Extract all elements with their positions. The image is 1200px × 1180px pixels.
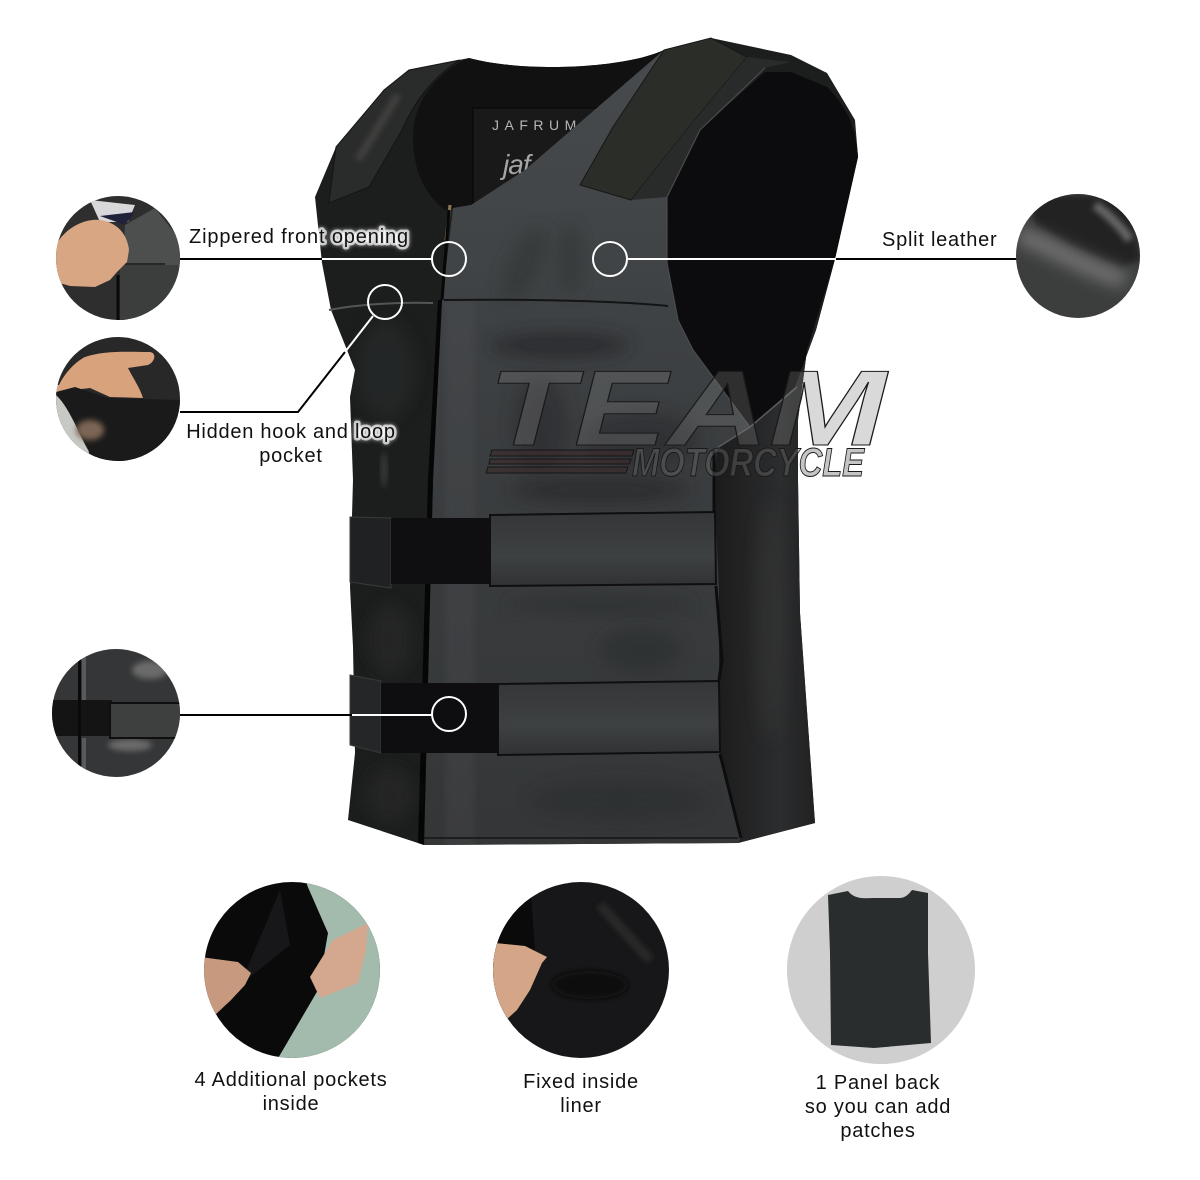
upper left tab bbox=[350, 517, 391, 588]
label: Zippered front opening bbox=[189, 226, 409, 248]
armhole piping bbox=[717, 387, 797, 448]
callout: hidden pocket: pocket bbox=[259, 445, 323, 467]
leader line bbox=[180, 352, 345, 412]
thumbnail: leather texture bbox=[1016, 194, 1140, 318]
back panel bbox=[714, 259, 835, 843]
watermark: Team Motorcycle: MOTORCYCLE bbox=[632, 441, 865, 485]
marker bbox=[593, 242, 627, 276]
lower right tab bbox=[498, 681, 720, 755]
watermark: Team Motorcycle: TEAM bbox=[488, 348, 890, 468]
callout: strap bbox=[52, 649, 466, 777]
thumbnail: pockets bbox=[200, 880, 385, 1060]
thumbnail: zipper bbox=[56, 196, 180, 320]
feature: panel back: patches bbox=[840, 1120, 916, 1142]
right shoulder strap bbox=[580, 38, 747, 200]
feature: fixed liner: liner bbox=[560, 1095, 602, 1117]
callout: zippered front opening bbox=[56, 196, 466, 320]
upper velcro band bbox=[391, 518, 491, 584]
left shoulder strap bbox=[329, 60, 460, 203]
brand text on label: JAFRUM bbox=[492, 117, 582, 133]
callout: split leather bbox=[593, 194, 1140, 318]
feature: additional pockets: inside bbox=[263, 1093, 319, 1115]
left pocket seam bbox=[329, 303, 433, 310]
thumbnail background bbox=[787, 876, 975, 1064]
leader line over vest bbox=[322, 258, 432, 260]
marker bbox=[432, 697, 466, 731]
left strap highlight bbox=[358, 95, 398, 160]
upper right tab bbox=[490, 512, 716, 586]
label: Fixed inside bbox=[523, 1071, 639, 1093]
label: 4 Additional pockets bbox=[195, 1069, 387, 1091]
thumbnail: strap bbox=[52, 649, 180, 777]
callout: hidden pocket bbox=[56, 285, 402, 467]
side seam bbox=[714, 450, 741, 838]
leader line bbox=[180, 258, 322, 260]
leather mottling bbox=[493, 236, 696, 666]
lower left tab bbox=[350, 675, 381, 753]
stitched seam bbox=[444, 300, 668, 306]
lower velcro band bbox=[381, 683, 499, 753]
neck interior bbox=[413, 50, 664, 210]
thumbnail: vest back bbox=[828, 890, 931, 1048]
thumbnail: pocket bbox=[56, 337, 180, 461]
leader line bbox=[180, 714, 352, 716]
speed stripes bbox=[486, 450, 634, 473]
feature: fixed liner bbox=[490, 882, 669, 1117]
label: Split leather bbox=[882, 229, 997, 251]
feature: panel back bbox=[787, 876, 975, 1142]
zipper bbox=[446, 205, 450, 240]
leader line bbox=[836, 258, 1018, 260]
leader line over vest bbox=[345, 316, 373, 352]
feature: additional pockets bbox=[195, 880, 387, 1115]
label: 1 Panel back bbox=[816, 1072, 941, 1094]
leader line over vest bbox=[352, 714, 432, 716]
inside label bbox=[473, 108, 600, 215]
right shoulder piping bbox=[631, 57, 791, 200]
zipper edge bbox=[418, 300, 442, 845]
hem bbox=[424, 837, 738, 839]
front panel bbox=[424, 38, 765, 845]
watermark: Team Motorcycle bbox=[486, 348, 890, 485]
armhole bbox=[667, 72, 858, 427]
brand logo on label: jaf bbox=[499, 149, 534, 180]
feature: panel back: so you can add bbox=[805, 1096, 951, 1118]
marker bbox=[432, 242, 466, 276]
vest photo bbox=[315, 38, 858, 850]
label: Hidden hook and loop bbox=[186, 421, 396, 443]
left panel streaks bbox=[355, 320, 784, 823]
vest silhouette bbox=[315, 38, 858, 845]
leader line over vest bbox=[628, 258, 836, 260]
thumbnail: liner bbox=[490, 882, 669, 1058]
marker bbox=[368, 285, 402, 319]
